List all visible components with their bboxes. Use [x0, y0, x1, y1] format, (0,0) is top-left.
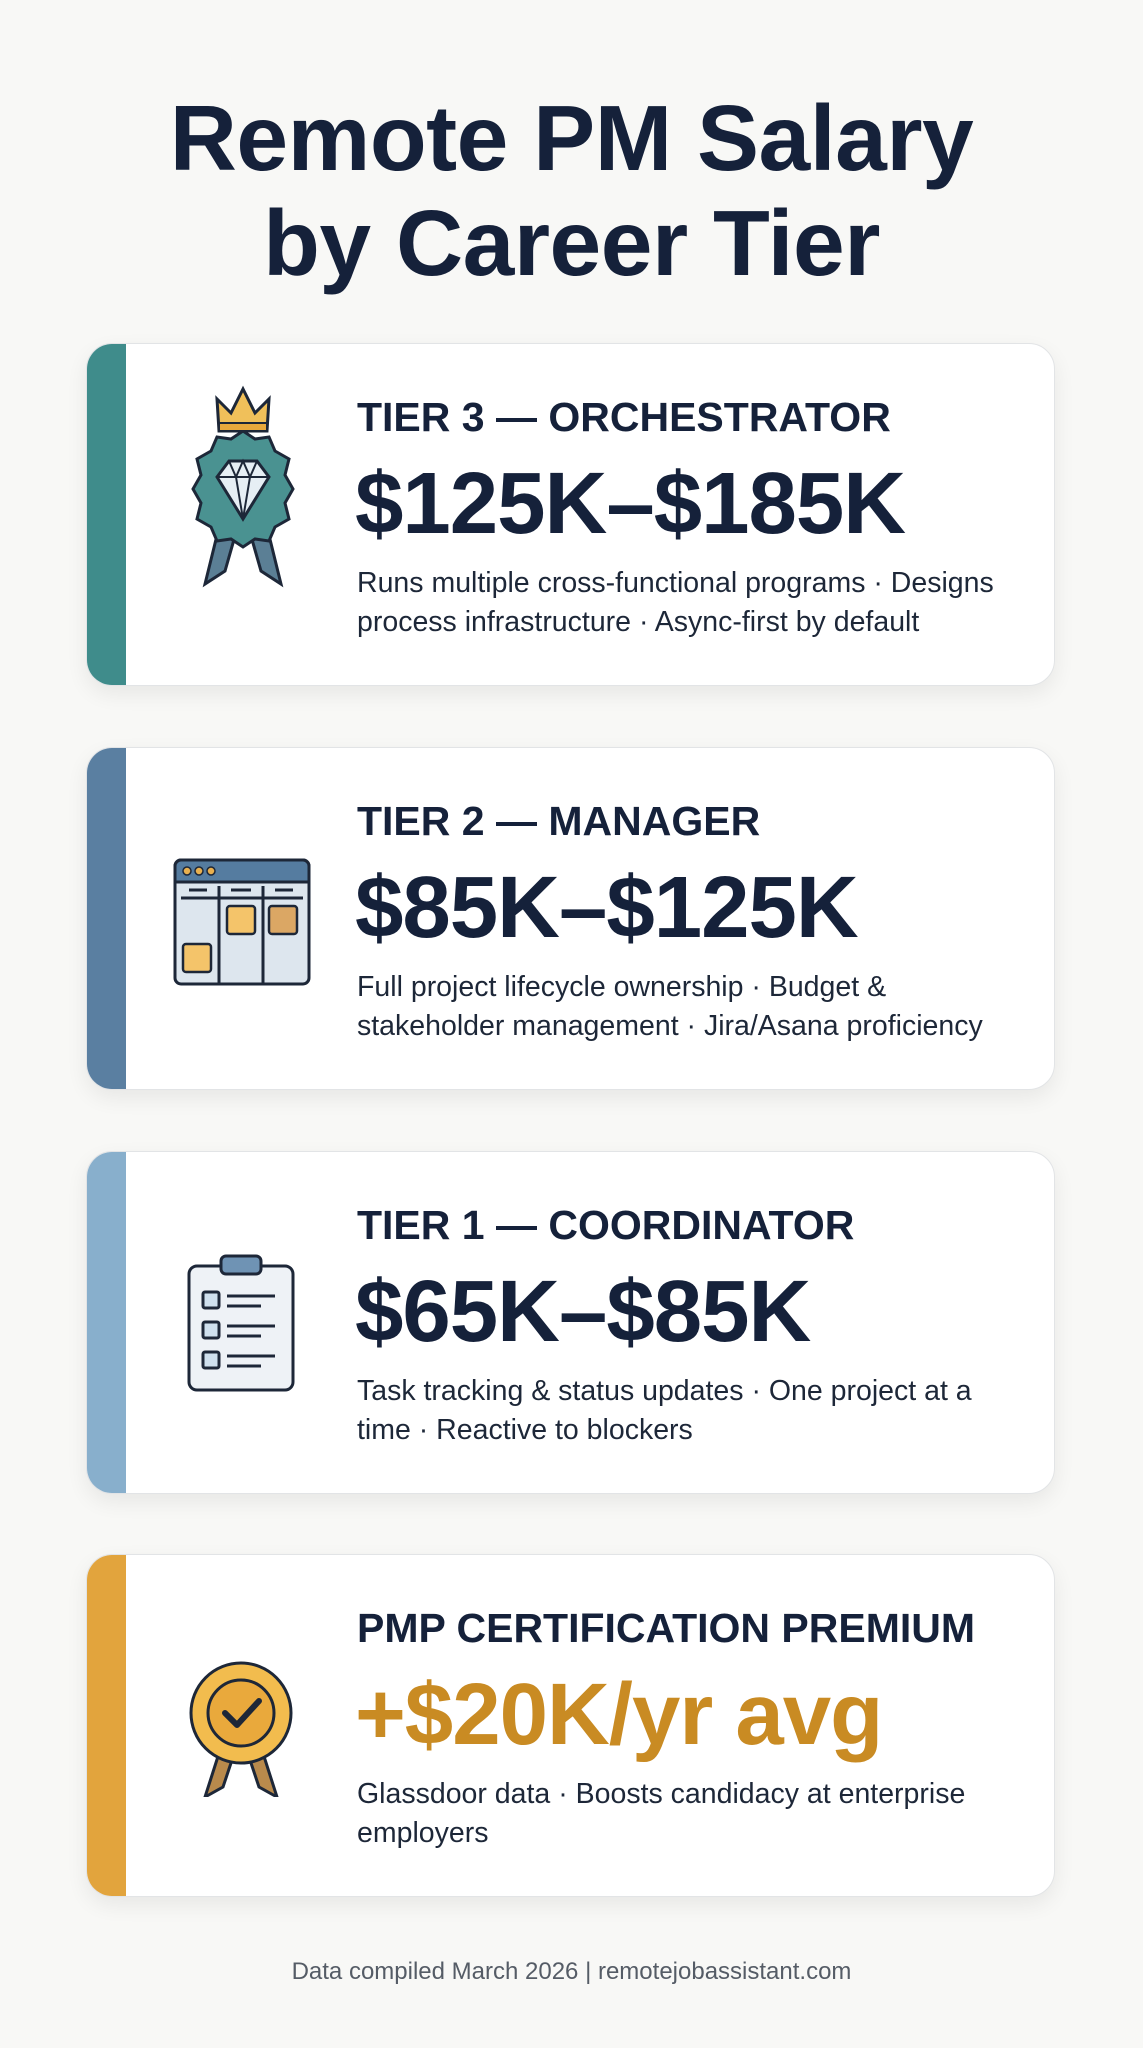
description: Glassdoor data · Boosts candidacy at enterprise employers [357, 1778, 965, 1849]
description: Full project lifecycle ownership · Budget & stakeholder management · Jira/Asana proficiency [357, 971, 983, 1042]
price: $85K–$125K [355, 859, 858, 956]
heading: TIER 2 — MANAGER [357, 798, 760, 844]
icon: clipboard checklist [188, 1254, 294, 1392]
icon: certification medal [190, 1662, 292, 1797]
panel: tier 1 [86, 1151, 1055, 1494]
panel: PMP premium [86, 1554, 1055, 1897]
footer: Data compiled March 2026 | remotejobassistant.com [292, 1958, 851, 1985]
price: $125K–$185K [355, 455, 905, 552]
icon: diamond badge with crown [191, 386, 295, 588]
title [170, 86, 974, 295]
heading: PMP CERTIFICATION PREMIUM [357, 1605, 975, 1651]
description: Runs multiple cross-functional programs · Designs process infrastructure · Async-first by default [357, 567, 994, 638]
title: by Career Tier [263, 191, 880, 295]
panel: tier 3 [86, 343, 1055, 686]
description: Task tracking & status updates · One project at a time · Reactive to blockers [357, 1375, 972, 1446]
title: Remote PM Salary [170, 86, 973, 190]
heading: TIER 3 — ORCHESTRATOR [357, 394, 891, 440]
heading: TIER 1 — COORDINATOR [357, 1202, 854, 1248]
price: $65K–$85K [355, 1263, 810, 1360]
panel: tier 2 [86, 747, 1055, 1090]
icon: kanban board [174, 858, 310, 986]
price: +$20K/yr avg [355, 1666, 882, 1763]
